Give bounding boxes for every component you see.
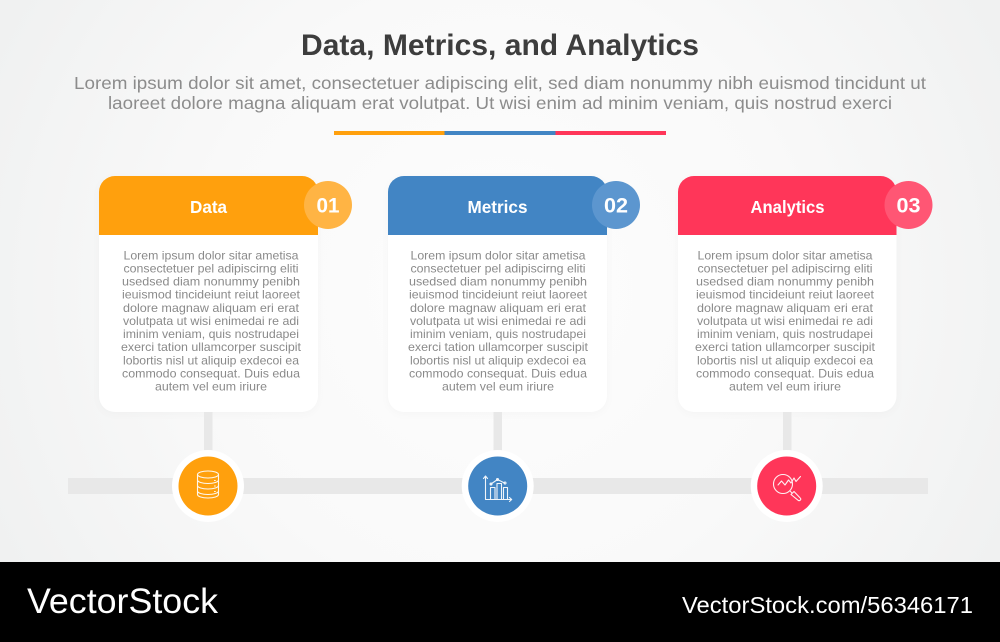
- body text: [408, 248, 589, 394]
- body text: volutpata ut wisi enimedai re adi: [410, 314, 586, 328]
- timeline bar: [68, 478, 928, 494]
- body text: lobortis nisl ut aliquip exdecoi ea: [410, 353, 586, 367]
- body text: dolore magnaw aliquam eri erat: [123, 301, 300, 315]
- icon: bar chart: [484, 476, 512, 502]
- subtitle text: [74, 73, 926, 113]
- heading: Metrics: Metrics: [468, 197, 528, 217]
- body text: lobortis nisl ut aliquip exdecoi ea: [697, 353, 873, 367]
- body text: dolore magnaw aliquam eri erat: [410, 301, 587, 315]
- number badge 01: 01: [316, 194, 340, 218]
- card shadow and body: [99, 176, 318, 414]
- heading: Data: Data: [190, 197, 227, 217]
- body text: commodo consequat. Duis edua: [409, 366, 587, 380]
- subtitle text: laoreet dolore magna aliquam erat volutpat. Ut wisi enim ad minim veniam, quis nostrud exerci: [108, 93, 892, 113]
- body text: commodo consequat. Duis edua: [122, 366, 300, 380]
- body text: autem vel eum iriure: [442, 380, 554, 394]
- body text: [695, 248, 876, 394]
- node: metrics: [462, 450, 534, 522]
- body text: iminim veniam, quis nostrudapei: [123, 327, 299, 341]
- title: Data, Metrics, and Analytics: [301, 29, 699, 62]
- card shadow and body: [678, 176, 896, 414]
- body text: iminim veniam, quis nostrudapei: [410, 327, 586, 341]
- footer logo text: VectorStock: [27, 582, 219, 621]
- body text: usedsed diam nonummy penibh: [122, 275, 300, 289]
- card header: [678, 176, 896, 235]
- connector stem: data: [204, 412, 212, 452]
- node: analytics: [751, 450, 823, 522]
- card header: [99, 176, 318, 235]
- body text: ieuismod tincideiunt reiut laoreet: [696, 288, 875, 302]
- body text: [121, 248, 302, 394]
- number badge 02: 02: [604, 194, 628, 218]
- heading: Analytics: Analytics: [750, 197, 825, 217]
- body text: exerci tation ullamcorper suscipit: [408, 340, 589, 354]
- accent divider: [334, 131, 666, 135]
- body text: autem vel eum iriure: [729, 380, 841, 394]
- connector stem: analytics: [783, 412, 792, 452]
- number badge 03: [884, 181, 932, 229]
- footer band: [0, 562, 1000, 642]
- body text: dolore magnaw aliquam eri erat: [697, 301, 874, 315]
- body text: consectetuer pel adipiscirng eliti: [410, 261, 586, 275]
- panel: data: [99, 176, 352, 414]
- panel: metrics: [388, 176, 640, 414]
- body text: autem vel eum iriure: [155, 380, 267, 394]
- body text: lobortis nisl ut aliquip exdecoi ea: [123, 353, 299, 367]
- card header: [388, 176, 607, 235]
- number badge 01: [304, 181, 352, 229]
- number badge 03: 03: [896, 194, 920, 218]
- body text: Lorem ipsum dolor sitar ametisa: [124, 248, 299, 262]
- body text: volutpata ut wisi enimedai re adi: [697, 314, 873, 328]
- node: data: [172, 450, 244, 522]
- body text: volutpata ut wisi enimedai re adi: [123, 314, 299, 328]
- body text: exerci tation ullamcorper suscipit: [121, 340, 302, 354]
- icon: database: [198, 471, 218, 498]
- body text: ieuismod tincideiunt reiut laoreet: [409, 288, 588, 302]
- footer image reference: VectorStock.com/56346171: [682, 592, 973, 618]
- body text: Lorem ipsum dolor sitar ametisa: [698, 248, 873, 262]
- subtitle text: Lorem ipsum dolor sit amet, consectetuer adipiscing elit, sed diam nonummy nibh euismod tincidunt ut: [74, 73, 926, 93]
- icon: magnifier with trend line: [774, 474, 801, 501]
- body text: exerci tation ullamcorper suscipit: [695, 340, 876, 354]
- body text: Lorem ipsum dolor sitar ametisa: [410, 248, 586, 262]
- body text: consectetuer pel adipiscirng eliti: [698, 261, 872, 275]
- connector stem: metrics: [494, 412, 502, 452]
- body text: usedsed diam nonummy penibh: [409, 275, 587, 289]
- body text: commodo consequat. Duis edua: [696, 366, 874, 380]
- panel: analytics: [678, 176, 932, 414]
- body text: iminim veniam, quis nostrudapei: [697, 327, 873, 341]
- number badge 02: [592, 181, 640, 229]
- body text: consectetuer pel adipiscirng eliti: [124, 261, 298, 275]
- body text: usedsed diam nonummy penibh: [696, 275, 874, 289]
- body text: ieuismod tincideiunt reiut laoreet: [122, 288, 301, 302]
- card shadow and body: [388, 176, 607, 414]
